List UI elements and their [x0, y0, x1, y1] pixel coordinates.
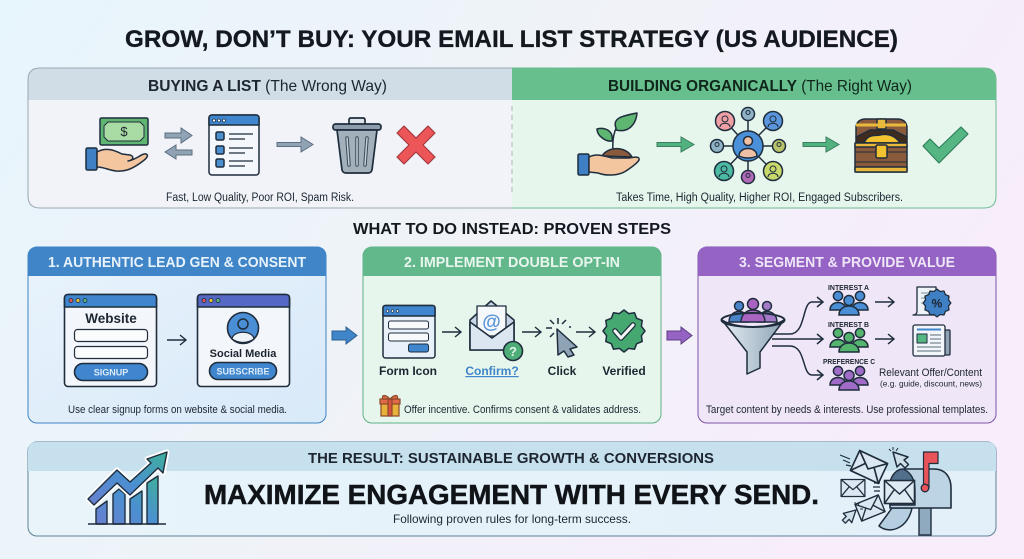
icon: form: [383, 306, 435, 358]
icon: gift: [380, 396, 400, 416]
icon: social media window: SUBSCRIBE: [216, 366, 270, 376]
icon: plant in hand: [578, 113, 639, 175]
icon: trash can: [333, 118, 381, 173]
icon: swap arrows: [165, 128, 192, 159]
icon: confirmation email: [470, 301, 522, 360]
arrow: list to trash: [277, 137, 313, 152]
icon: verified badge: [603, 310, 645, 352]
arrow: group A to offer: [875, 297, 894, 307]
label: interest A: INTEREST A: [828, 283, 870, 292]
label: click: Click: [548, 364, 577, 378]
arrow: step 2 to step 3: [667, 327, 692, 344]
icon: green check: [923, 127, 968, 163]
panel: step 1 lead gen: [28, 247, 326, 423]
icon: confirmation email: @: [482, 312, 501, 333]
heading: step 1: 1. AUTHENTIC LEAD GEN & CONSENT: [48, 254, 306, 271]
icon: growth chart: [88, 452, 167, 524]
arrow: form to email: [442, 327, 461, 337]
icon: money in hand: [86, 118, 148, 171]
arrow: click to verified: [576, 327, 595, 337]
icon: discount document: %: [932, 296, 943, 310]
icon: mailbox with envelopes: [840, 447, 951, 535]
arrow: step 1 to step 2: [332, 327, 357, 344]
icon: discount document: [913, 287, 951, 317]
text: step 2 caption: Offer incentive. Confirms consent & validates address.: [404, 404, 641, 416]
arrow: website to social: [167, 335, 186, 345]
icon: contact list: [209, 115, 259, 175]
headline: maximize engagement: MAXIMIZE ENGAGEMENT WITH EVERY SEND.: [204, 479, 819, 510]
icon: website signup window: [64, 294, 156, 386]
icon: confirmation email: ?: [509, 344, 517, 359]
arrow: email to click: [522, 327, 541, 337]
arrow: group B to content: [875, 334, 894, 344]
text: buying summary: Fast, Low Quality, Poor ROI, Spam Risk.: [166, 192, 354, 204]
label: interest B: INTEREST B: [828, 320, 870, 329]
icon: social media window: Social Media: [210, 348, 277, 360]
text: result note: Following proven rules for long-term success.: [393, 512, 631, 526]
text: offer examples: (e.g. guide, discount, news): [880, 378, 982, 388]
panel: buying a list: [28, 68, 512, 208]
icon: audience funnel: [722, 298, 784, 374]
arrows: funnel branches: [772, 297, 823, 380]
icon: people group C: [830, 366, 868, 390]
icon: red cross: [397, 126, 435, 164]
icon: treasure chest: [855, 119, 907, 172]
text: building summary: Takes Time, High Quality, Higher ROI, Engaged Subscribers.: [616, 192, 903, 204]
text: step 1 caption: Use clear signup forms on website & social media.: [68, 404, 287, 416]
heading: step 3: 3. SEGMENT & PROVIDE VALUE: [739, 254, 955, 271]
heading: proven steps: WHAT TO DO INSTEAD: PROVEN STEPS: [353, 221, 671, 238]
arrow: plant to network: [657, 137, 694, 152]
icon: people group A: [830, 291, 868, 315]
label: verified: Verified: [602, 364, 646, 378]
label: form icon: Form Icon: [379, 364, 437, 378]
panel: step 2 double opt-in: [363, 247, 661, 423]
icon: website signup window: SIGNUP: [94, 368, 128, 378]
icon: subscriber network: [710, 108, 786, 184]
icon: newsletter: [913, 325, 950, 356]
heading: step 2: 2. IMPLEMENT DOUBLE OPT-IN: [404, 254, 620, 271]
icon: social media window: [198, 294, 290, 386]
title: GROW, DON’T BUY: YOUR EMAIL LIST STRATEGY (US AUDIENCE): [125, 26, 898, 53]
panel: result: [28, 442, 996, 536]
heading: result: THE RESULT: SUSTAINABLE GROWTH & CONVERSIONS: [308, 451, 714, 467]
heading: buying a list: BUYING A LIST (The Wrong Way): [148, 78, 387, 95]
arrow: network to chest: [803, 137, 839, 152]
icon: click cursor: [546, 318, 577, 357]
icon: money in hand: $: [120, 124, 128, 139]
heading: building organically: BUILDING ORGANICALLY (The Right Way): [608, 78, 912, 95]
text: step 3 caption: Target content by needs & interests. Use professional templates.: [706, 404, 988, 416]
label: preference C: PREFERENCE C: [823, 357, 876, 366]
label: confirm link: Confirm?: [465, 364, 519, 378]
text: relevant offer: Relevant Offer/Content: [879, 367, 982, 379]
icon: website signup window: Website: [85, 311, 137, 326]
panel: step 3 segment: [698, 247, 996, 423]
icon: people group B: [830, 328, 868, 352]
panel: building organically: [512, 68, 996, 208]
panel: comparison of buying and building: [28, 68, 996, 208]
